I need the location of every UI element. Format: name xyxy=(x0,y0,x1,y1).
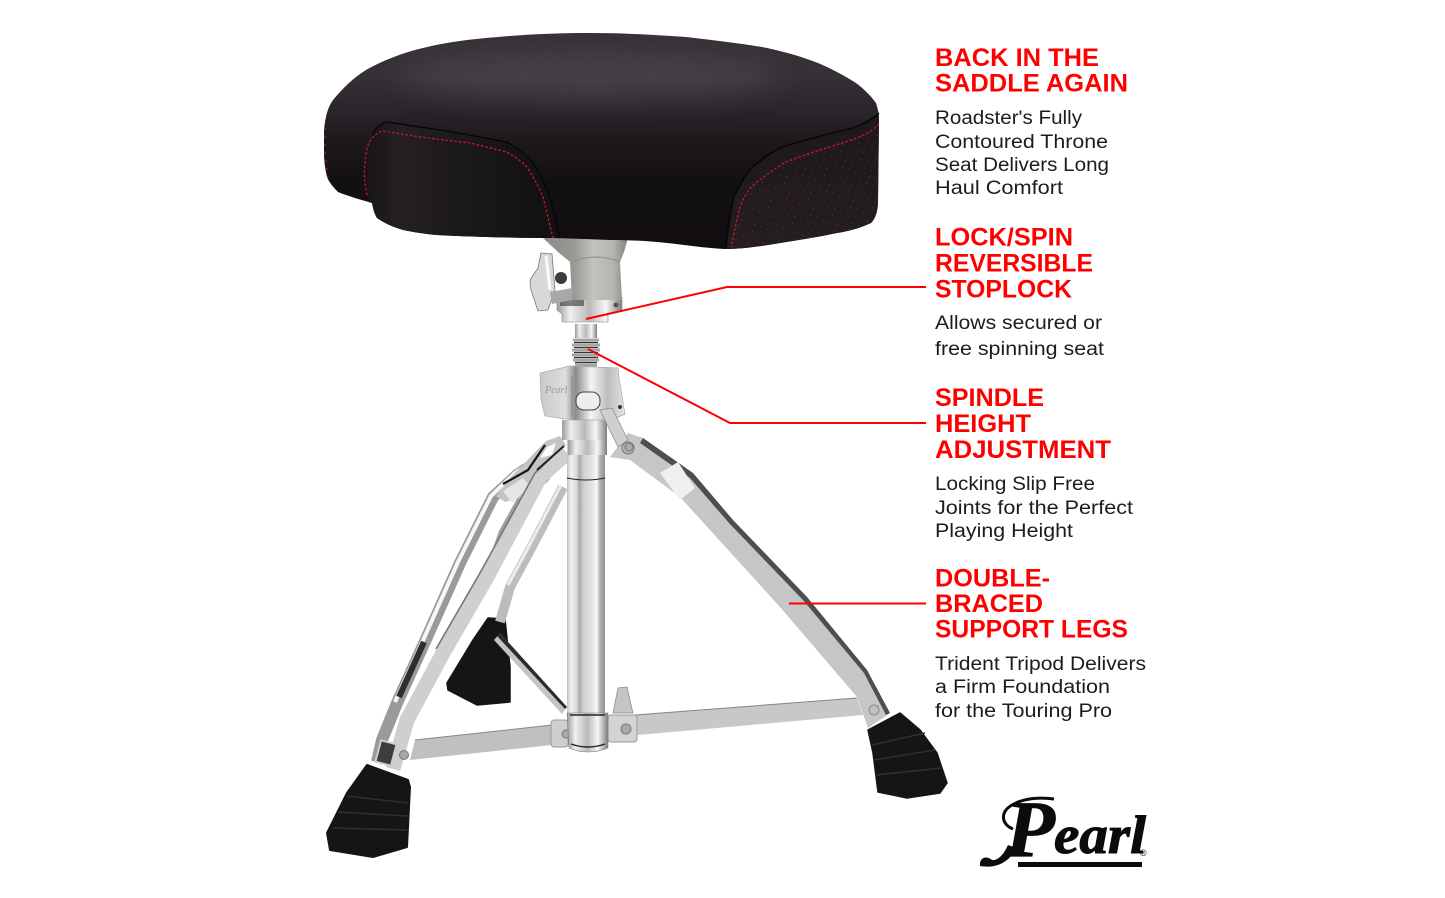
heading: DOUBLE- xyxy=(935,564,1050,592)
body text: Playing Height xyxy=(935,521,1074,542)
body text: Roadster's Fully xyxy=(935,108,1083,129)
stoplock collar xyxy=(557,297,622,322)
left bracket xyxy=(375,740,397,766)
lower right clamp xyxy=(608,715,637,742)
body text xyxy=(935,654,1146,722)
height clamp xyxy=(540,366,625,420)
heading xyxy=(935,564,1128,644)
body text: Trident Tripod Delivers xyxy=(935,654,1146,675)
centre tube xyxy=(567,440,605,720)
lower left clamp xyxy=(551,720,570,747)
left rear legs xyxy=(488,476,563,622)
left foot xyxy=(327,765,410,857)
body text: Contoured Throne xyxy=(935,132,1108,153)
right foot brace xyxy=(635,698,863,735)
heading: STOPLOCK xyxy=(935,276,1072,304)
body text: Allows secured or xyxy=(935,313,1103,334)
left hinge plate xyxy=(496,436,566,503)
body text: Locking Slip Free xyxy=(935,474,1095,495)
right leg xyxy=(610,433,890,728)
heading xyxy=(935,44,1128,98)
spindle threads xyxy=(572,324,600,365)
heading: SADDLE AGAIN xyxy=(935,70,1128,98)
leader line: support legs xyxy=(789,602,926,604)
heading xyxy=(935,384,1111,464)
seat casting xyxy=(543,238,628,300)
logo: Pearl: ® xyxy=(1140,848,1147,858)
heading xyxy=(935,224,1093,304)
leader line: stoplock xyxy=(586,287,926,319)
heading: BRACED xyxy=(935,590,1043,618)
left arched leg xyxy=(377,450,555,762)
body text: Haul Comfort xyxy=(935,178,1064,199)
rear foot xyxy=(447,618,510,705)
body text: a Firm Foundation xyxy=(935,677,1110,698)
leader line: spindle xyxy=(588,349,926,423)
seat body xyxy=(324,33,879,249)
left foot brace xyxy=(410,725,552,760)
body text: Seat Delivers Long xyxy=(935,155,1109,176)
body text: for the Touring Pro xyxy=(935,701,1112,722)
seat seams xyxy=(325,113,879,248)
callout: lock/spin stoplock xyxy=(935,224,1105,360)
lower tube collar xyxy=(567,713,608,752)
right foot xyxy=(868,713,947,798)
body text: free spinning seat xyxy=(935,339,1105,360)
heading: BACK IN THE xyxy=(935,44,1099,72)
rear brace xyxy=(494,633,567,714)
body text xyxy=(935,313,1105,360)
heading: ADJUSTMENT xyxy=(935,436,1111,464)
clamp lever xyxy=(600,408,633,451)
left pivot bolt xyxy=(400,750,408,760)
logo: Pearl: earl xyxy=(1054,805,1146,865)
lower clamp wing xyxy=(613,687,633,713)
heading: HEIGHT xyxy=(935,410,1031,438)
callout: back in the saddle xyxy=(935,44,1128,199)
product photo: drum throne xyxy=(324,33,947,857)
logo: Pearl: P xyxy=(1004,786,1056,874)
callout: double-braced support legs xyxy=(935,564,1146,722)
seat xyxy=(324,33,880,252)
callout: spindle height adjustment xyxy=(935,384,1134,542)
body text xyxy=(935,108,1109,199)
logo: Pearl xyxy=(980,786,1147,874)
upper collar xyxy=(562,420,607,440)
heading: SPINDLE xyxy=(935,384,1044,412)
seat shading xyxy=(365,53,880,252)
heading: SUPPORT LEGS xyxy=(935,616,1128,644)
left straight leg xyxy=(393,446,567,769)
upper tube collar xyxy=(567,437,607,480)
wing nut xyxy=(530,253,572,311)
body text: Joints for the Perfect xyxy=(935,498,1134,519)
heading: REVERSIBLE xyxy=(935,250,1093,278)
height clamp: Pearl xyxy=(544,385,567,396)
body text xyxy=(935,474,1134,542)
heading: LOCK/SPIN xyxy=(935,224,1073,252)
